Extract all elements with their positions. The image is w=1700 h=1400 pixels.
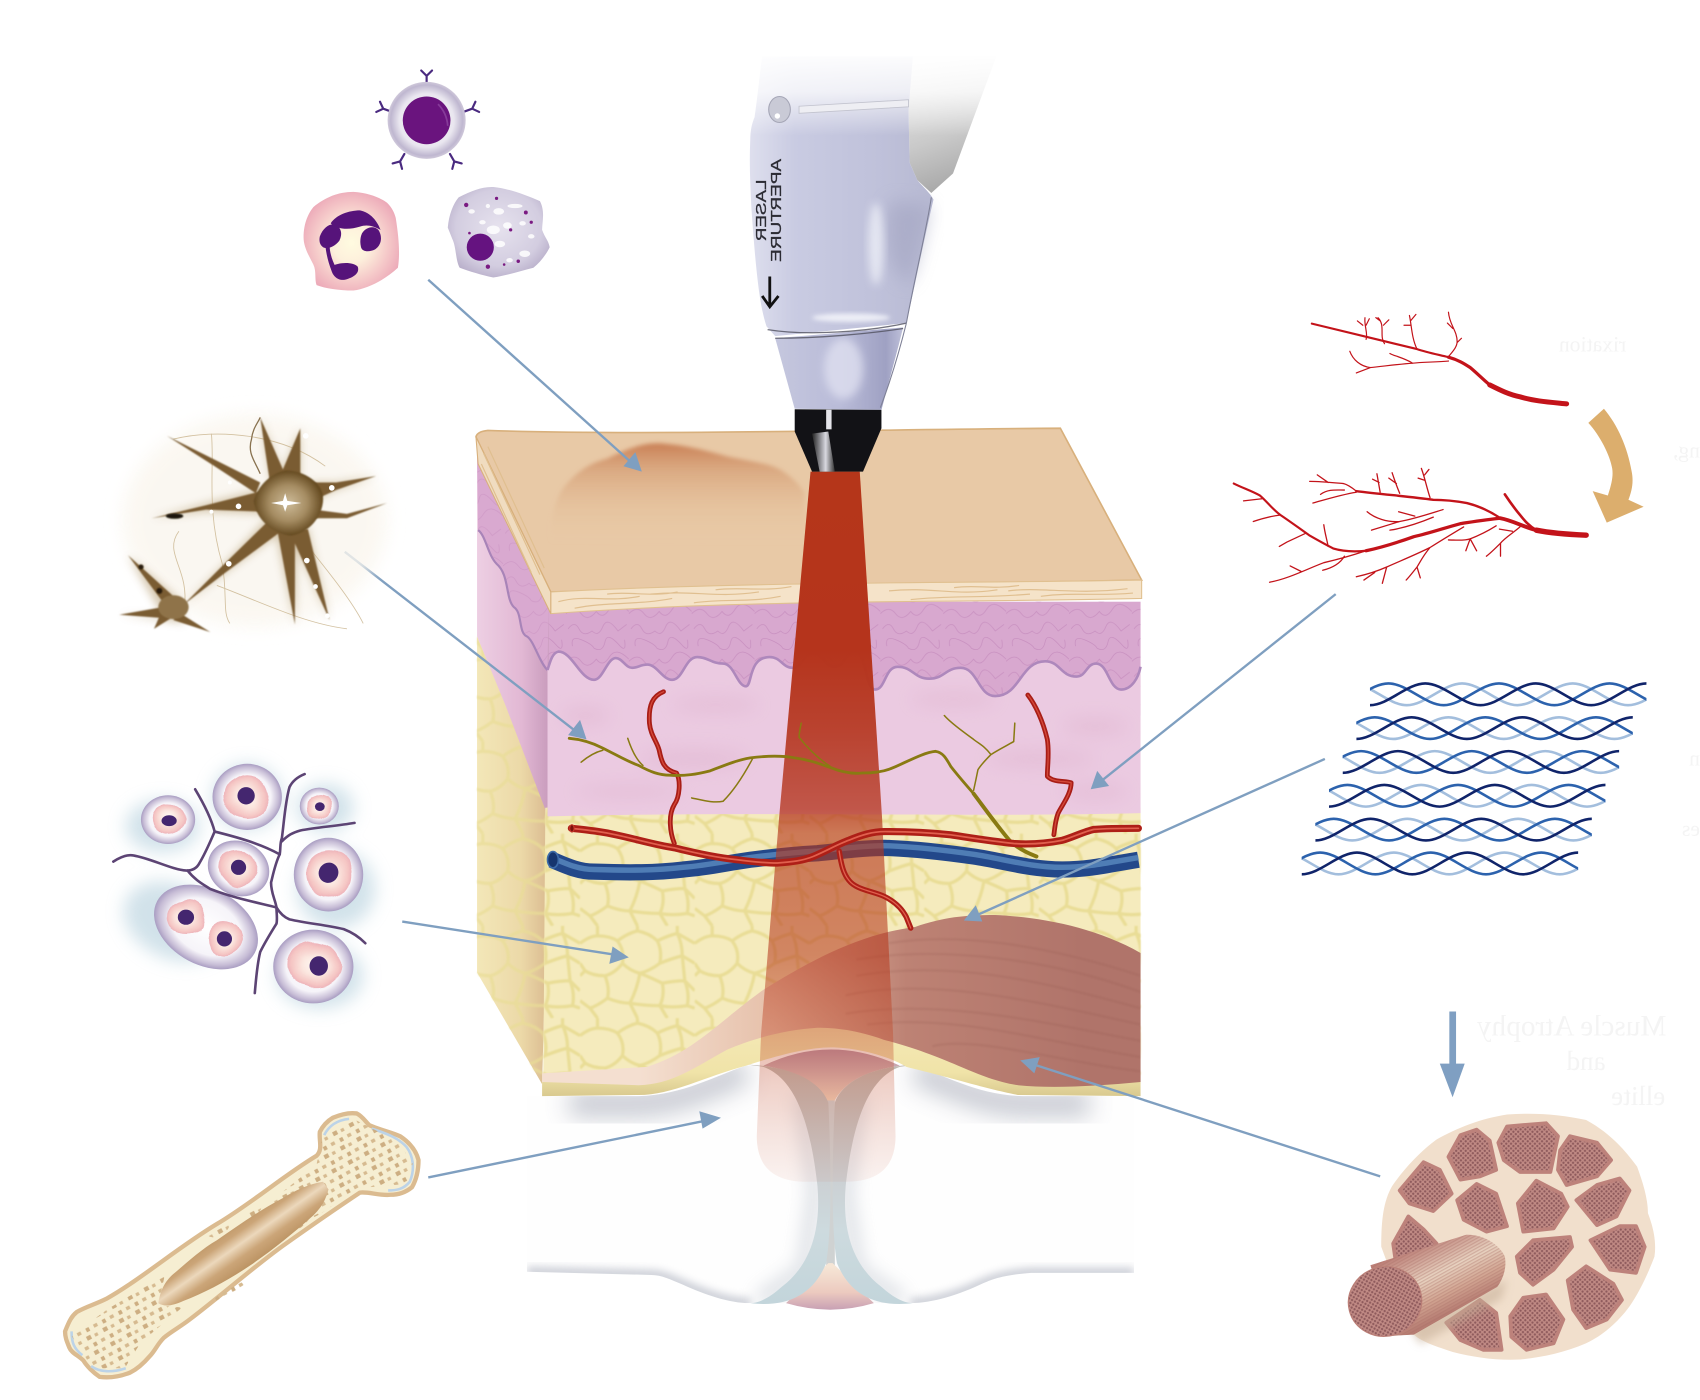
arrow: immune cells to lesion [428, 280, 642, 472]
vein [548, 846, 1138, 872]
arrow: neuron to nerve [345, 552, 587, 739]
small neuron [119, 555, 210, 632]
big neuron processes [152, 417, 387, 624]
big neuron soma [254, 471, 323, 536]
vessels before treatment [1312, 312, 1567, 404]
sparkles [209, 433, 335, 618]
artery branch to muscle [839, 851, 911, 928]
faint ghost captions: n [1689, 746, 1700, 770]
fade to white at the top [737, 49, 1008, 136]
medullary cavity [158, 1182, 329, 1306]
dermal arteries [649, 692, 1071, 843]
pink cytoplasm [152, 775, 351, 988]
neutrophil [304, 192, 399, 291]
cylinder shadow [1409, 1279, 1507, 1344]
leader arrows [345, 280, 1465, 1177]
arrow: muscle atrophy down arrow [1440, 1012, 1465, 1097]
cell shells [141, 795, 195, 844]
bone joint below skin block [520, 1049, 1149, 1317]
fascicles [1393, 1123, 1645, 1350]
black nozzle [795, 409, 881, 472]
faint ghost captions: es [1682, 817, 1700, 841]
aperture label: APERTURE [769, 159, 785, 262]
bone [65, 1113, 418, 1377]
cell membranes [113, 774, 365, 993]
macrophage [448, 187, 550, 278]
faint ghost captions: rixation [1559, 332, 1626, 356]
neuron fine fibres [173, 417, 363, 629]
spongy bone [271, 1120, 413, 1231]
collagen fibres [1228, 683, 1700, 874]
aperture arrow [762, 276, 778, 307]
right cartilage [833, 1065, 915, 1304]
arrow: muscle bundle to muscle [1020, 1057, 1380, 1176]
vessels after treatment [1234, 468, 1586, 583]
aperture label [754, 159, 785, 262]
faint ghost captions: and [1566, 1046, 1606, 1076]
muscle layer [542, 915, 1141, 1087]
laser beam [757, 472, 896, 1182]
left cartilage [748, 1065, 830, 1304]
arrow: bone to joint [428, 1111, 721, 1177]
teal glow [111, 764, 375, 1008]
adipocyte cluster [111, 764, 375, 1008]
skin block: fat layer [543, 808, 1141, 1090]
curved growth arrow [1588, 409, 1644, 523]
skin block: side face [477, 447, 551, 1084]
arrow: vessels to dermis [1091, 594, 1336, 789]
synovial space [763, 1049, 900, 1105]
pulled-out fascicle [1370, 1235, 1505, 1336]
laser handpiece [737, 49, 1008, 472]
faint ghost captions: ng, [1673, 439, 1700, 463]
perimysium [1381, 1114, 1655, 1360]
lymphocyte [376, 70, 479, 169]
faint ghost captions: Muscle Atrophy [1477, 1010, 1666, 1042]
skin block: dermis layer [548, 652, 1141, 816]
skin top surface [476, 428, 1142, 614]
skin block: epidermis layer [549, 602, 1141, 716]
aperture label: LASER [754, 179, 770, 241]
nerve [569, 716, 1036, 857]
faint ghost captions: ellite [1611, 1081, 1665, 1111]
stratum corneum band [551, 580, 1142, 614]
muscle bundle cross-section [1340, 1114, 1655, 1360]
articular cartilage [324, 1119, 413, 1190]
collar [775, 327, 903, 410]
button [769, 96, 790, 123]
neuron glow [123, 414, 387, 627]
handpiece body [750, 56, 933, 336]
grey handle [909, 56, 996, 193]
lesion on skin surface [550, 443, 804, 544]
fascia band [542, 1019, 1141, 1096]
neurons [119, 414, 387, 632]
arrow: adipocytes to fat [402, 922, 629, 964]
nuclei [162, 787, 342, 976]
arrow: collagen to fascia [964, 759, 1325, 922]
main artery [570, 825, 1138, 928]
faint ghost captions [1477, 332, 1700, 1111]
